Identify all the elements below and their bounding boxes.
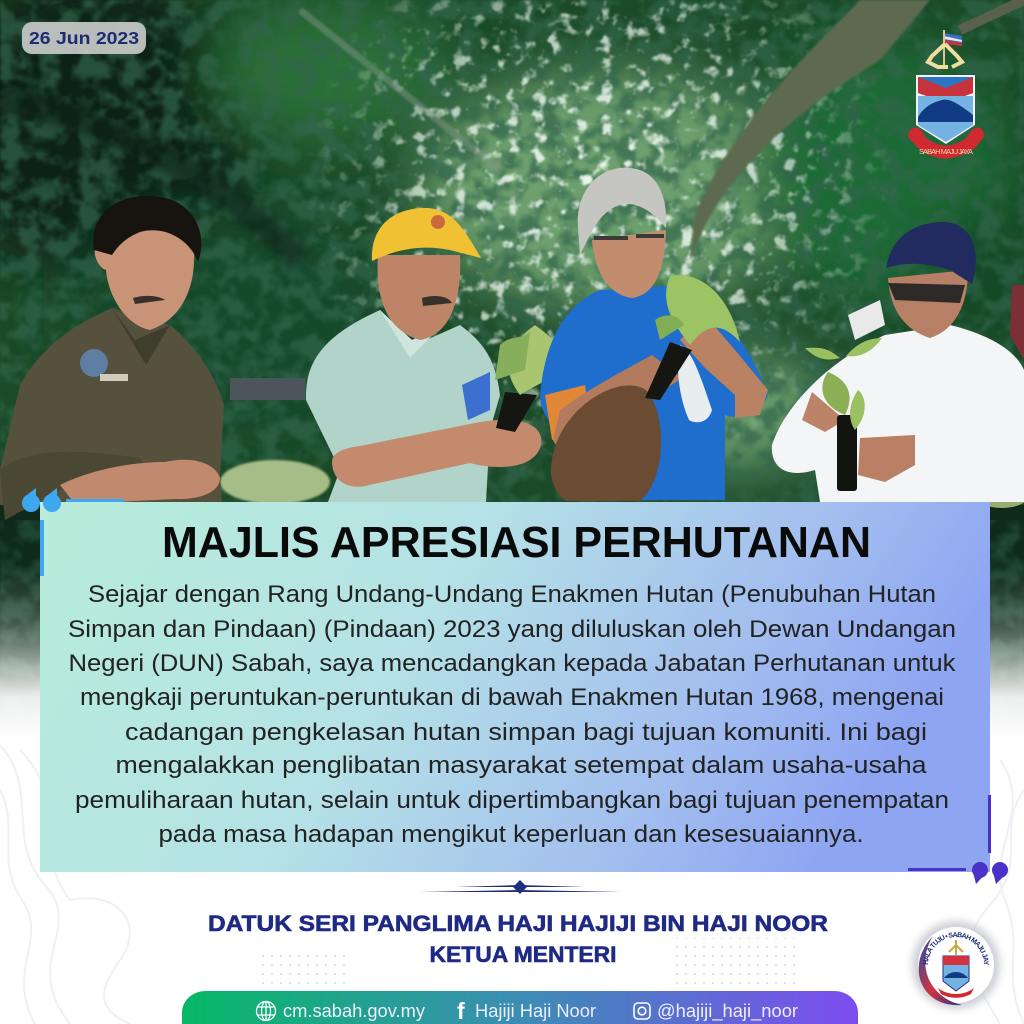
icon: Hala Tuju Sabah Maju Jaya seal: HALA TUJU • SABAH MAJU JAYA [923, 932, 989, 965]
man 1: khaki shirt [0, 196, 224, 520]
seedling 4 [805, 338, 882, 491]
decorative opening quote marks [22, 488, 124, 576]
footer pill with contact links [182, 991, 858, 1024]
body text: Sejajar dengan Rang Undang-Undang Enakmen Hutan (Penubuhan Hutan [88, 581, 936, 608]
seedling 3 [645, 275, 740, 400]
instagram handle: @hajiji_haji_noor [657, 1001, 798, 1022]
icon: facebook: f [457, 998, 465, 1024]
heading: MAJLIS APRESIASI PERHUTANAN [162, 518, 871, 567]
man 4: navy cap and white shirt [772, 222, 1024, 502]
body text: pada masa hadapan mengikut keperluan dan kesesuaiannya. [158, 821, 864, 848]
facebook name: Hajiji Haji Noor [475, 1001, 596, 1021]
man 3: silver hair and blue polo [540, 168, 768, 501]
dot patterns [256, 938, 802, 990]
body text: Simpan dan Pindaan) (Pindaan) 2023 yang diluluskan oleh Dewan Undangan [68, 616, 956, 643]
signatory name and title [208, 911, 828, 967]
icon: globe [256, 1001, 276, 1021]
body text: cadangan pengkelasan hutan simpan bagi tujuan komuniti. Ini bagi [125, 719, 927, 746]
panel: quote box [22, 488, 1008, 884]
body text: mengkaji peruntukan-peruntukan di bawah Enakmen Hutan 1968, mengenai [80, 684, 944, 711]
website: cm.sabah.gov.my [283, 1001, 425, 1021]
man 2: cap and pale green shirt [306, 208, 541, 502]
seedling 2 [495, 325, 562, 432]
body text [68, 581, 957, 848]
ground foliage [220, 378, 1024, 508]
photo subjects: four men holding seedlings [0, 168, 1024, 520]
decorative closing quote marks [908, 795, 1008, 884]
divider ornament [420, 880, 622, 894]
date badge: 26 Jun 2023 [29, 28, 139, 48]
date badge [22, 22, 146, 54]
emblem: Sabah coat of arms [908, 30, 984, 158]
body text: Negeri (DUN) Sabah, saya mencadangkan kepada Jabatan Perhutanan untuk [68, 650, 957, 677]
lower backdrop: forest fading to white [0, 505, 1024, 1024]
icon: instagram [634, 1003, 650, 1019]
signatory name and title: DATUK SERI PANGLIMA HAJI HAJIJI BIN HAJI NOOR [208, 911, 828, 936]
background: forest canopy photo [0, 0, 1024, 505]
body text: pemuliharaan hutan, selain untuk dipertimbangkan bagi tujuan penempatan [75, 787, 949, 814]
body text: mengalakkan penglibatan masyarakat setempat dalam usaha-usaha [116, 752, 927, 779]
signatory name and title: KETUA MENTERI [430, 942, 616, 967]
emblem: Sabah coat of arms: SABAH MAJU JAYA [919, 147, 973, 156]
